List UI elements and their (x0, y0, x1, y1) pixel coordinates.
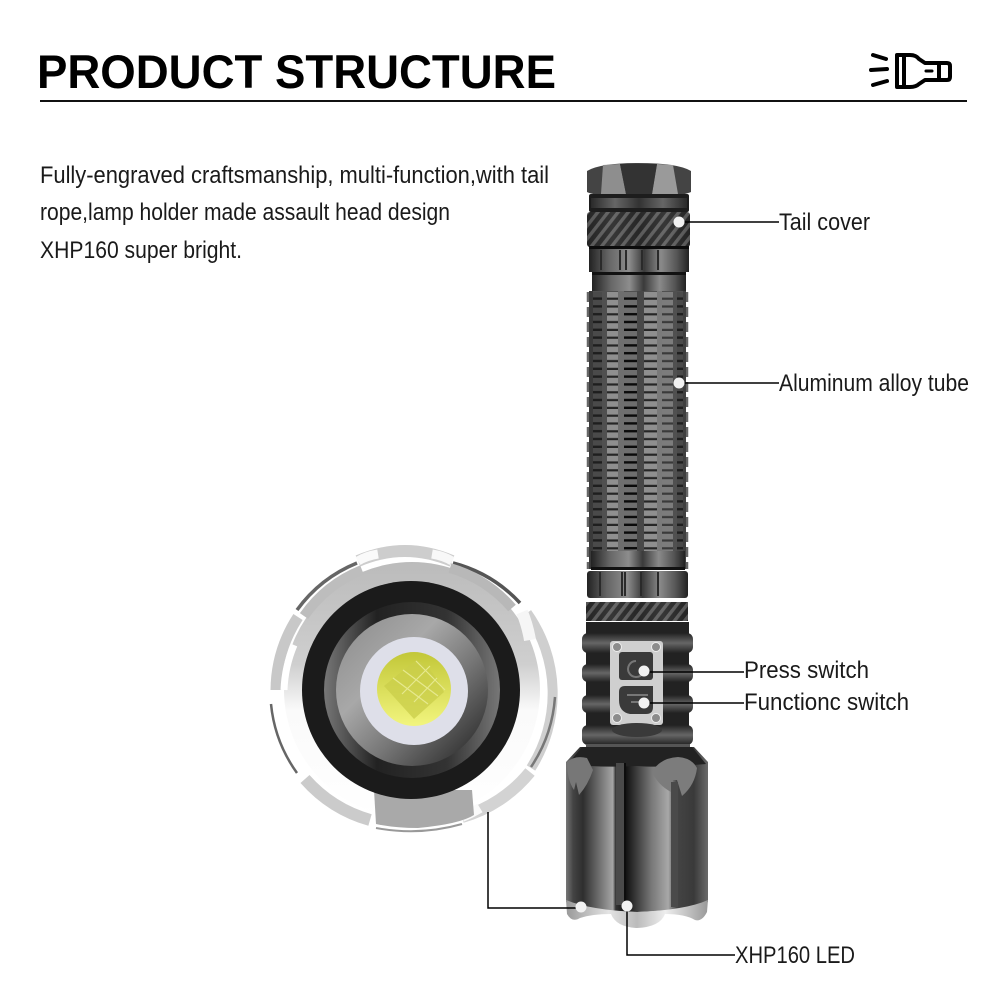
lower left silver segment (305, 779, 370, 820)
ribbed tube (588, 291, 686, 569)
tail knurled ring (587, 212, 690, 247)
lower collar (591, 551, 685, 570)
callout: press switch: Press switch (744, 657, 869, 684)
connector: lens view to head (488, 812, 586, 912)
crown (566, 900, 708, 928)
white reflector (360, 637, 468, 745)
switch section (586, 622, 689, 747)
callout: tail cover: Tail cover (779, 209, 870, 236)
description text (40, 162, 549, 264)
switch plate (610, 641, 663, 737)
tail cap (587, 163, 691, 197)
callout: XHP160 LED: XHP160 LED (735, 942, 855, 969)
lower right silver segment (462, 772, 530, 817)
description text: Fully-engraved craftsmanship, multi-function,with tail (40, 162, 549, 189)
title: PRODUCT STRUCTURE (37, 45, 556, 98)
callout: tail cover (674, 209, 870, 236)
right silver segment (527, 613, 553, 768)
tail grooved ring (589, 249, 689, 272)
side scallops (588, 292, 686, 569)
flashlight body (566, 163, 708, 928)
callout: function switch: Functionc switch (744, 689, 909, 716)
LED chip (377, 652, 451, 726)
inner bezel annulus (284, 562, 540, 818)
upper left dark arc (297, 563, 357, 610)
callout: aluminum alloy tube: Aluminum alloy tube (779, 370, 969, 397)
bottom tab (374, 790, 474, 828)
left silver segment (276, 617, 298, 690)
callout: XHP160 LED (622, 900, 855, 969)
callout: press switch (638, 657, 869, 684)
callout: function switch (638, 689, 909, 716)
icon: flashlight (871, 55, 950, 87)
front view of lens (271, 551, 555, 831)
black barrel ring (302, 581, 520, 799)
left lower thin arc (271, 704, 297, 773)
description text: XHP160 super bright. (40, 237, 242, 264)
press button (619, 652, 653, 680)
lower knurled ring (586, 602, 688, 621)
top silver segment (358, 551, 452, 561)
function button (619, 686, 653, 714)
head (566, 747, 708, 912)
description text: rope,lamp holder made assault head design (40, 199, 450, 226)
upper right dark arc (453, 563, 520, 603)
callout: aluminum alloy tube (674, 370, 969, 397)
neck (586, 744, 690, 751)
